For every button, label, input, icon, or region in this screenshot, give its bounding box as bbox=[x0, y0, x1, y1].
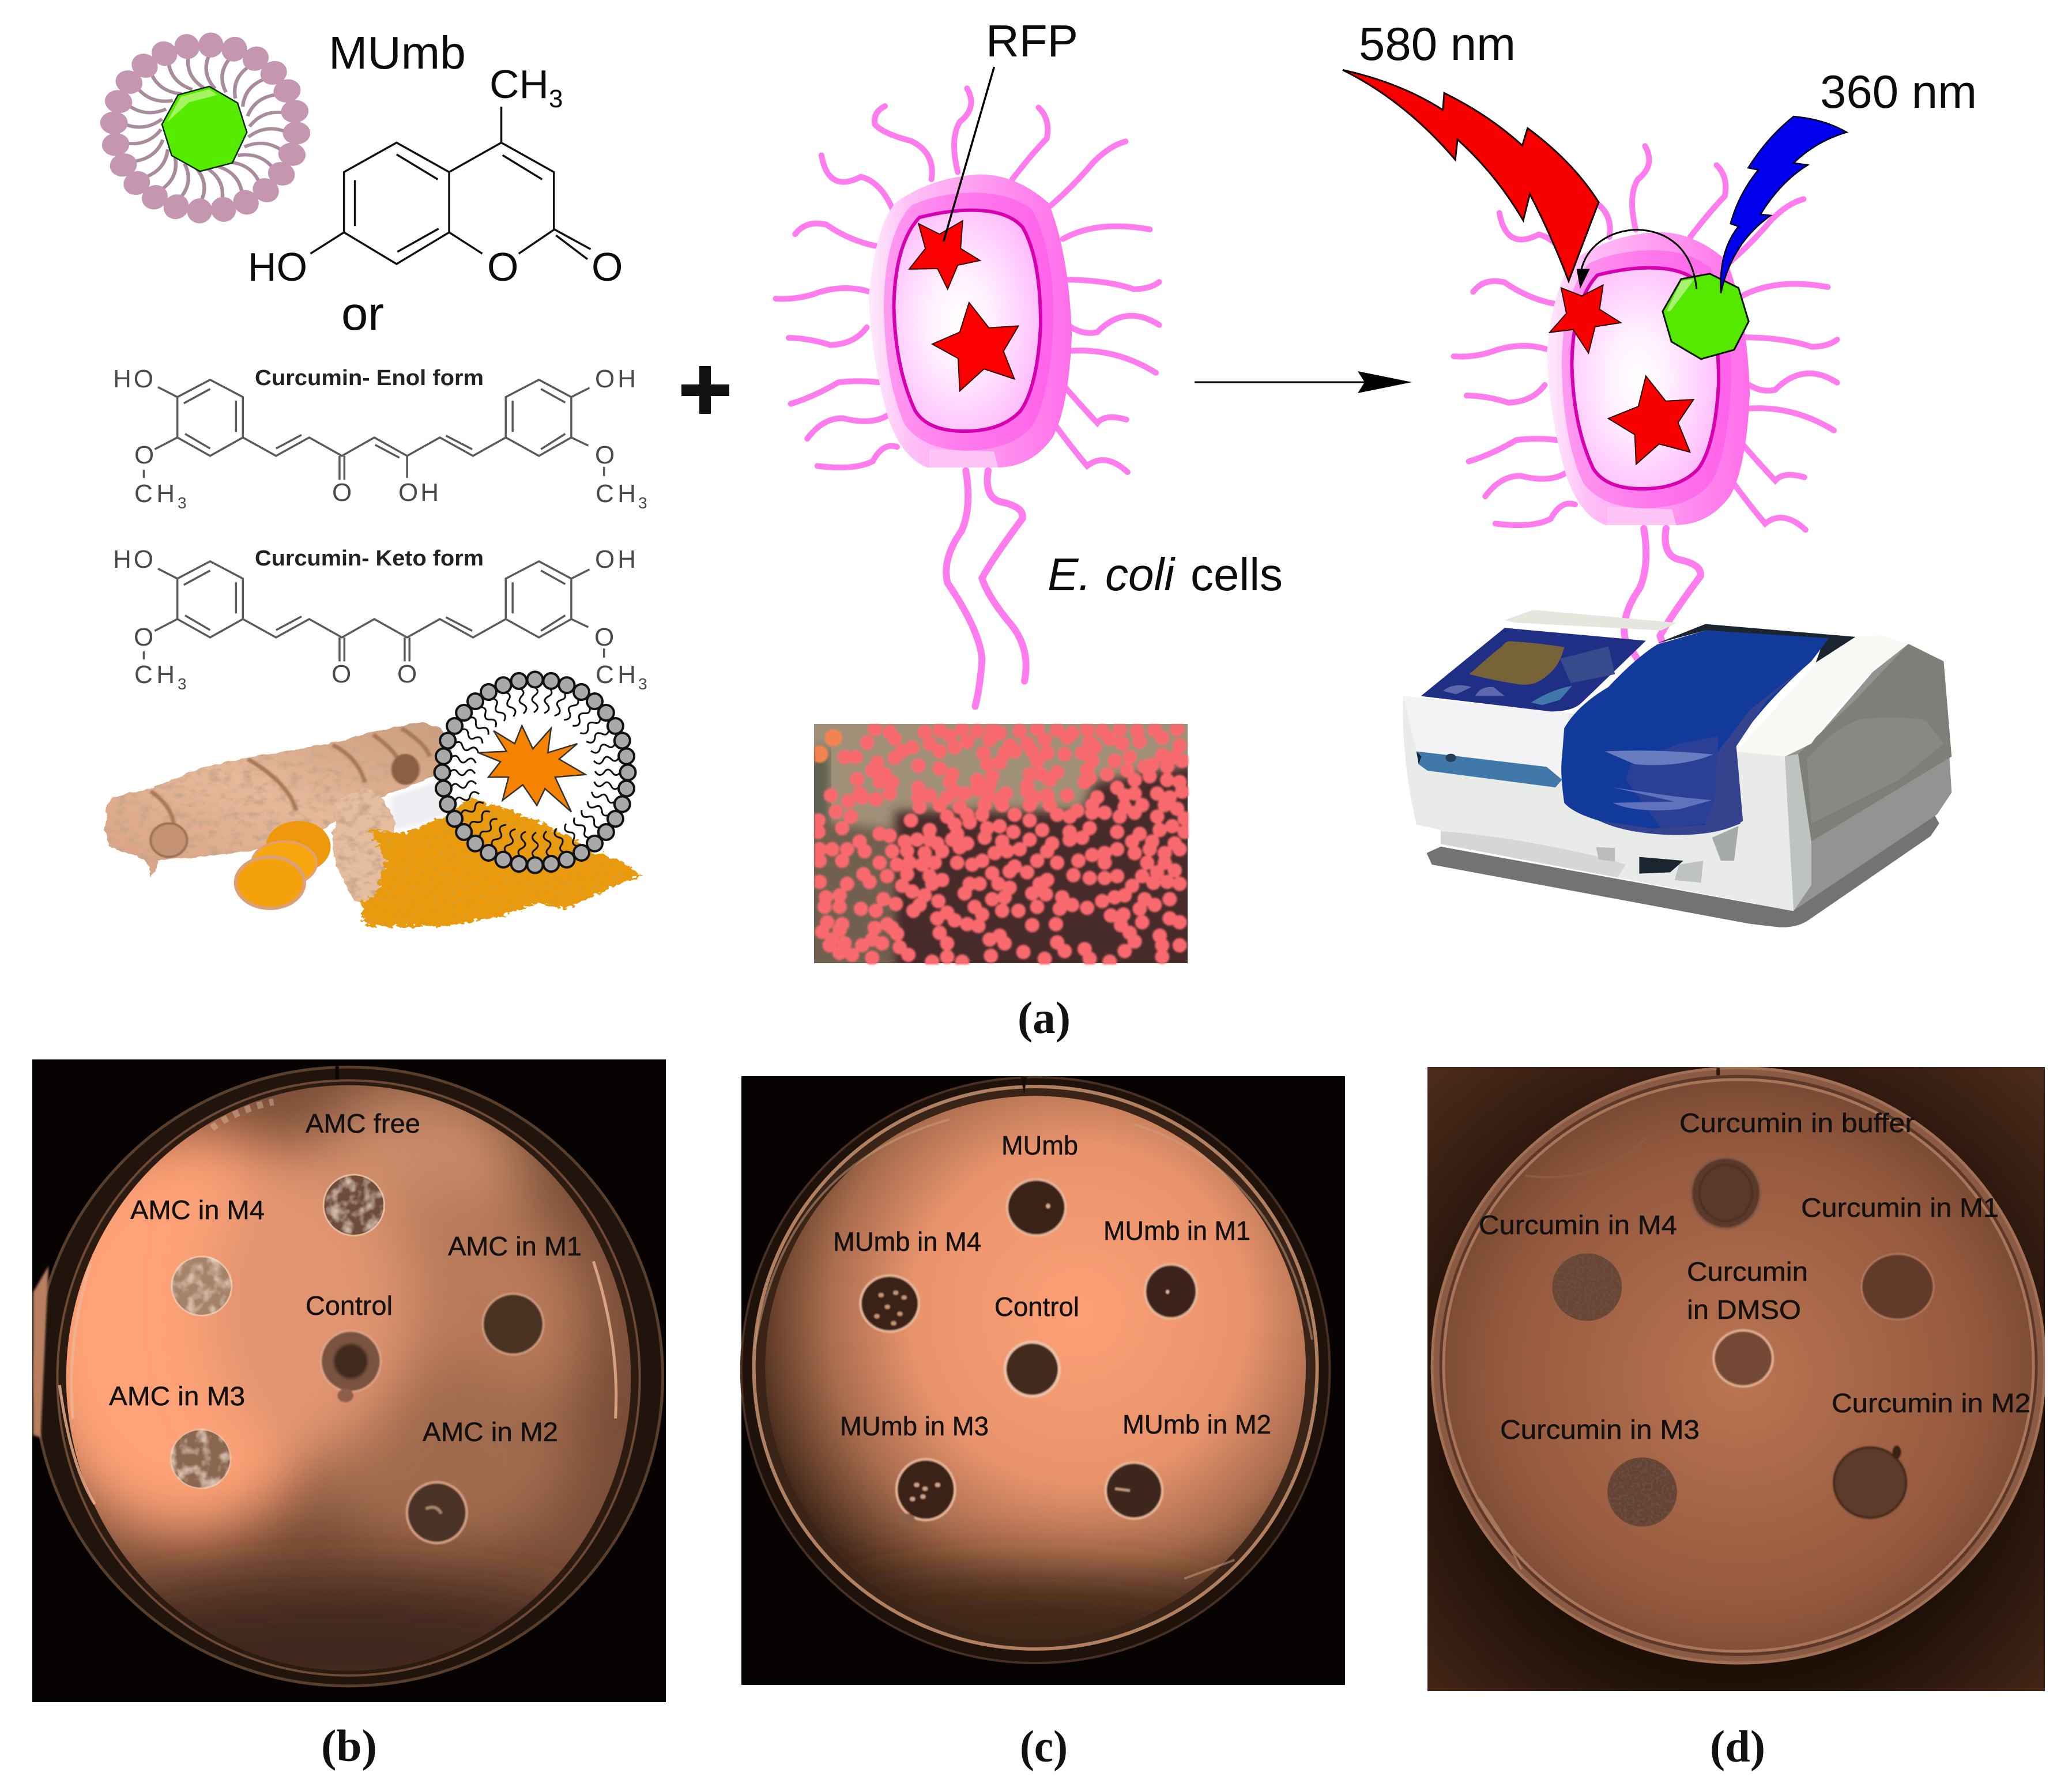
chemical structure: MUmb: O bbox=[592, 244, 623, 289]
symbol: plus bbox=[681, 366, 729, 414]
arrow: energy transfer bbox=[1577, 229, 1697, 289]
chemical structure: curcumin keto form: O bbox=[594, 623, 614, 651]
icon: red lightning 580 nm bbox=[1343, 70, 1599, 281]
icon: spectrofluorometer bbox=[1403, 610, 1952, 927]
chemical structure: MUmb: CH bbox=[489, 62, 549, 107]
well: AMC in M3 bbox=[171, 1430, 231, 1488]
label: RFP: RFP bbox=[986, 16, 1078, 66]
well: MUmb in M1 bbox=[1145, 1264, 1197, 1319]
label: Curcumin in M1: Curcumin in M1 bbox=[1801, 1193, 1999, 1223]
well: AMC in M4 bbox=[172, 1257, 232, 1315]
label: Curcumin in DMSO: in DMSO bbox=[1687, 1295, 1801, 1325]
label: AMC in M2: AMC in M2 bbox=[423, 1417, 558, 1447]
chemical structure: curcumin keto form: 3 bbox=[178, 675, 187, 693]
label: Curcumin in buffer: Curcumin in buffer bbox=[1679, 1108, 1915, 1138]
caption: (b): (b) bbox=[321, 1721, 377, 1771]
label: Curcumin in M4: Curcumin in M4 bbox=[1479, 1210, 1677, 1240]
label: MUmb in M1: MUmb in M1 bbox=[1103, 1216, 1250, 1246]
chemical structure: curcumin enol form: O bbox=[134, 441, 154, 469]
panel b: AMC plate bbox=[22, 1059, 666, 1771]
photo: petri dish b bbox=[22, 1059, 666, 1723]
caption: (d): (d) bbox=[1710, 1721, 1765, 1771]
well: AMC free bbox=[323, 1175, 385, 1236]
photo: turmeric root and powder bbox=[106, 722, 640, 926]
caption: (a): (a) bbox=[1018, 993, 1071, 1043]
panel d: curcumin plate bbox=[1427, 1067, 2045, 1771]
well: curcumin in M2 bbox=[1834, 1446, 1906, 1518]
caption: (c): (c) bbox=[1020, 1721, 1068, 1771]
chemical structure: MUmb bbox=[248, 62, 623, 289]
icon: MUmb loaded micelle bbox=[100, 32, 311, 224]
label: 360 nm: 360 nm bbox=[1820, 66, 1977, 118]
label: Control: Control bbox=[994, 1292, 1079, 1322]
label: AMC free: AMC free bbox=[306, 1108, 420, 1138]
chemical structure: curcumin enol form: O bbox=[595, 441, 615, 469]
photo: petri dish d bbox=[1427, 1067, 2045, 1691]
well: AMC in M1 bbox=[483, 1293, 544, 1355]
label: Control: Control bbox=[306, 1291, 393, 1321]
icon: blue lightning 360 nm bbox=[1721, 116, 1847, 293]
chemical structure: curcumin enol form bbox=[113, 365, 647, 512]
well: curcumin in M1 bbox=[1862, 1254, 1934, 1319]
chemical structure: curcumin keto form: O bbox=[397, 660, 417, 688]
well: curcumin in buffer bbox=[1691, 1157, 1761, 1228]
chemical structure: curcumin keto form: Curcumin- Keto form bbox=[255, 546, 484, 571]
chemical structure: curcumin keto form: HO bbox=[113, 545, 153, 574]
well: MUmb in M3 bbox=[896, 1459, 955, 1525]
photo: petri dish c bbox=[741, 1076, 1345, 1738]
icon: E. coli cell with RFP bbox=[776, 67, 1159, 706]
chemical structure: curcumin enol form: OH bbox=[398, 478, 439, 507]
chemical structure: curcumin keto form: CH bbox=[134, 661, 175, 689]
label: MUmb in M2: MUmb in M2 bbox=[1122, 1409, 1271, 1439]
text: or: or bbox=[341, 288, 384, 340]
label: Curcumin in DMSO: Curcumin bbox=[1687, 1257, 1808, 1287]
label: Curcumin in M2: Curcumin in M2 bbox=[1832, 1388, 2030, 1418]
well: MUmb bbox=[1007, 1179, 1065, 1236]
panel c: MUmb plate bbox=[741, 1076, 1345, 1771]
chemical structure: curcumin enol form: OH bbox=[595, 365, 636, 393]
chemical structure: curcumin keto form: O bbox=[134, 623, 153, 651]
label: MUmb in M4: MUmb in M4 bbox=[833, 1227, 981, 1257]
label: MUmb in M3: MUmb in M3 bbox=[840, 1411, 989, 1441]
icon: E. coli with FRET pair bbox=[1343, 70, 1847, 764]
label: E. coli cells: cells bbox=[1191, 549, 1283, 600]
chemical structure: curcumin enol form: CH bbox=[134, 480, 175, 508]
panel a: schematic of assay bbox=[100, 16, 1977, 1043]
chemical structure: curcumin keto form: CH bbox=[596, 661, 636, 689]
well: curcumin in DMSO bbox=[1713, 1330, 1773, 1386]
label: 580 nm: 580 nm bbox=[1359, 18, 1516, 70]
label: AMC in M1: AMC in M1 bbox=[448, 1231, 582, 1261]
chemical structure: curcumin enol form: O bbox=[332, 478, 352, 507]
chemical structure: curcumin enol form: CH bbox=[596, 480, 636, 508]
chemical structure: MUmb: HO bbox=[248, 244, 307, 289]
label: E. coli cells: coli bbox=[1105, 549, 1176, 600]
well: AMC in M2 bbox=[407, 1482, 467, 1543]
chemical structure: curcumin keto form: OH bbox=[595, 545, 636, 574]
well: curcumin in M3 bbox=[1608, 1458, 1676, 1526]
chemical structure: curcumin keto form: O bbox=[331, 660, 351, 688]
chemical structure: curcumin keto form bbox=[113, 545, 647, 693]
chemical structure: MUmb: 3 bbox=[549, 85, 563, 113]
well: control bbox=[1005, 1342, 1060, 1397]
label: AMC in M3: AMC in M3 bbox=[109, 1381, 245, 1411]
chemical structure: curcumin enol form: 3 bbox=[178, 494, 187, 512]
chemical structure: curcumin enol form: Curcumin- Enol form bbox=[255, 366, 484, 390]
well: curcumin in M4 bbox=[1553, 1254, 1621, 1320]
label: Curcumin in M3: Curcumin in M3 bbox=[1500, 1415, 1700, 1444]
chemical structure: curcumin enol form: HO bbox=[113, 365, 153, 393]
well: MUmb in M4 bbox=[860, 1276, 919, 1332]
arrow bbox=[1195, 371, 1412, 393]
label: AMC in M4: AMC in M4 bbox=[130, 1195, 265, 1225]
chemical structure: curcumin keto form: 3 bbox=[638, 675, 647, 693]
well: control bbox=[321, 1331, 381, 1402]
chemical structure: curcumin enol form: 3 bbox=[638, 494, 647, 512]
chemical structure: MUmb: O bbox=[487, 244, 518, 289]
icon: curcumin loaded liposome bbox=[435, 672, 635, 873]
photo: RFP E. coli colonies on plate bbox=[807, 724, 1199, 974]
label: MUmb: MUmb bbox=[1001, 1130, 1078, 1160]
title: MUmb: MUmb bbox=[329, 27, 466, 78]
well: MUmb in M2 bbox=[1106, 1462, 1162, 1519]
label: E. coli cells: E. bbox=[1048, 549, 1091, 600]
